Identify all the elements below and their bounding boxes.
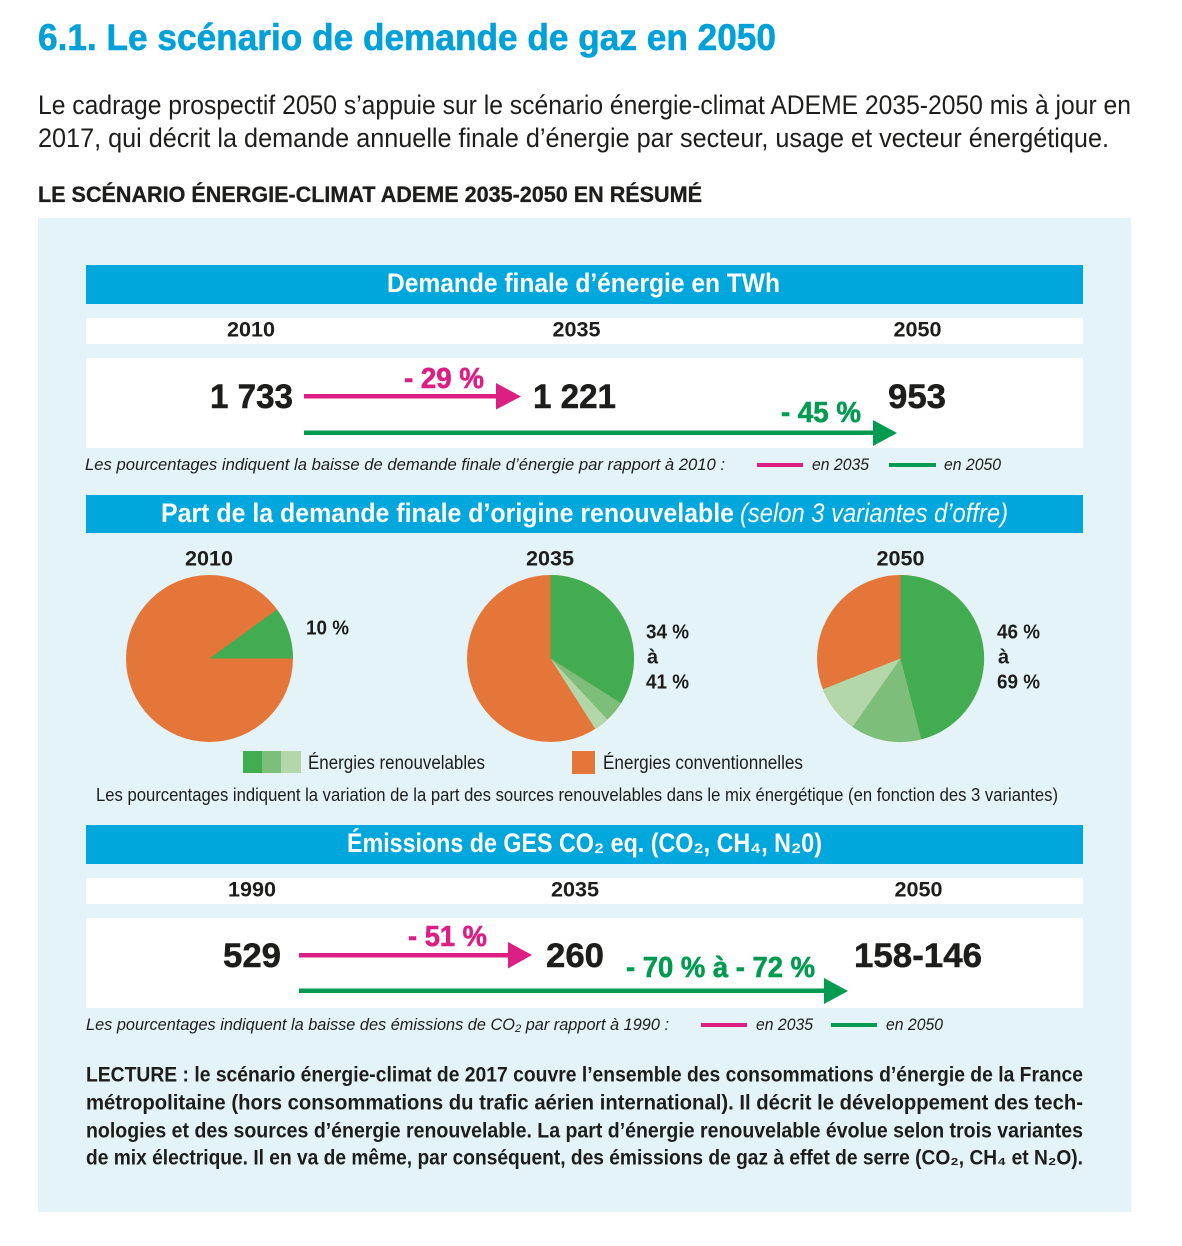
intro text: 2017, qui décrit la demande annuelle finale d’énergie par secteur, usage et vecteur énergétique. [38,123,1109,153]
pie chart: 2050: à [998,646,1010,668]
reading note: de mix électrique. Il en va de même, par conséquent, des émissions de gaz à effet de serre (CO₂, CH₄ et N₂O). [86,1146,1083,1170]
pie chart: 2010: 2010 [185,548,233,570]
panel: summary background [38,218,1131,1212]
legend: renewable energies: Énergies renouvelables [308,753,485,774]
pie chart: 2050: 69 % [997,672,1040,694]
year row: demand: 2035 [552,318,601,342]
values row: demand: 953 [888,378,946,416]
values row: demand [86,358,1083,448]
panel: final energy demand [85,265,1083,474]
caption and legend: emissions: en 2050 [886,1015,944,1034]
heading band: emissions [86,825,1083,864]
year row: emissions: 2035 [551,878,599,902]
values row: emissions: 260 [546,937,604,975]
values row: demand: 1 733 [210,378,293,416]
year row: emissions: 1990 [228,878,276,902]
panel: renewable share [86,495,1083,805]
year row: demand: 2010 [227,318,275,342]
year row: emissions: 2050 [894,878,942,902]
reading note [86,1064,1083,1170]
arrow: -51 %: - 51 % [408,921,487,953]
arrow: -70 % to -72 %: - 70 % à - 72 % [626,952,815,984]
heading band: renewable share [86,495,1083,533]
pie chart: 2010 [126,548,349,742]
arrow: -45 %: - 45 % [781,397,861,429]
caption and legend: demand: en 2035 [812,455,870,474]
panel: GHG emissions [86,825,1083,1034]
year row: demand: 2050 [894,318,942,342]
caption: renewable share: Les pourcentages indiquent la variation de la part des sources renouvelables dans le mix énergétique (en fonction des 3 variantes) [96,785,1058,805]
heading band: demand: Demande finale d’énergie en TWh [387,268,780,298]
pie chart: 2035: 34 % [646,622,689,644]
legend: renewable energies [243,751,485,774]
pie chart: 2035: 41 % [646,672,689,694]
reading note: nologies et des sources d’énergie renouvelable. La part d’énergie renouvelable évolue selon trois variantes [86,1120,1083,1142]
pie chart: 2050: 2050 [876,548,924,570]
pie chart: 2035: à [647,646,659,668]
year row: demand [86,318,1083,344]
values row: demand: 1 221 [533,378,616,416]
reading note: LECTURE : le scénario énergie-climat de 2017 couvre l’ensemble des consommations d’énergie de la France [86,1064,1083,1086]
values row: emissions: 529 [223,937,281,975]
caption and legend: demand: Les pourcentages indiquent la baisse de demande finale d’énergie par rapport à 2010 : [85,455,725,474]
title: 6.1. Le scénario de demande de gaz en 2050 [38,17,776,58]
heading band: renewable share: (selon 3 variantes d’offre) [740,498,1008,528]
arrow: -29 % [304,363,521,410]
pie chart: 2050 [817,548,1040,742]
caption and legend: emissions: Les pourcentages indiquent la baisse des émissions de CO₂ par rapport à 1990 : [86,1015,669,1034]
caption and legend: demand: en 2050 [944,455,1002,474]
heading band: renewable share: Part de la demande finale d’origine renouvelable [161,498,734,528]
values row: emissions [86,918,1083,1008]
arrow: -29 %: - 29 % [404,363,484,395]
values row: emissions: 158-146 [854,937,982,975]
arrow: -45 % [304,397,897,446]
arrow: -51 % [299,921,532,968]
heading band: demand [86,265,1083,304]
heading band: emissions: Émissions de GES CO₂ eq. (CO₂, CH₄, N₂0) [347,827,822,858]
pie chart: 2050: 46 % [997,622,1040,644]
intro text [38,90,1131,153]
pie chart: 2010: 10 % [306,618,349,640]
section heading: LE SCÉNARIO ÉNERGIE-CLIMAT ADEME 2035-2050 EN RÉSUMÉ [38,182,702,207]
caption and legend: emissions: en 2035 [756,1015,814,1034]
intro text: Le cadrage prospectif 2050 s’appuie sur le scénario énergie-climat ADEME 2035-2050 mis à jour en [38,90,1131,120]
legend: conventional energies: Énergies conventionnelles [603,753,803,774]
arrow: -70 % to -72 % [299,952,848,1004]
year row: emissions [86,878,1083,904]
pie chart: 2035: 2035 [526,548,574,570]
pie chart: 2035 [467,548,689,742]
reading note: métropolitaine (hors consommations du trafic aérien international). Il décrit le développement des tech- [86,1092,1083,1114]
